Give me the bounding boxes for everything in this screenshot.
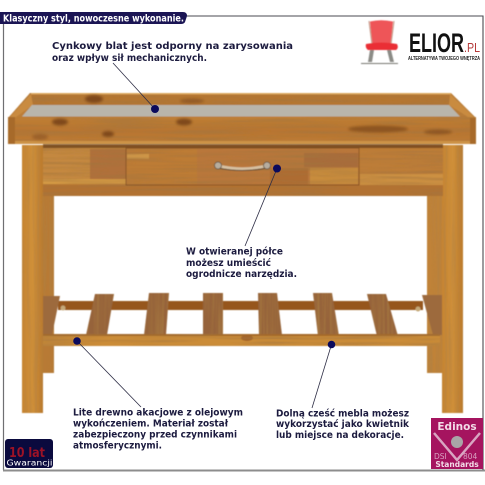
- callout: acacia wood: atmosferycznymi.: [73, 440, 162, 452]
- wooden table illustration: [8, 93, 476, 413]
- badge: Edinos standards: [431, 418, 483, 469]
- callout: drawer: możesz umieścić: [186, 258, 271, 269]
- callout: acacia wood: Lite drewno akacjowe z olejowym: [73, 408, 243, 418]
- callout: acacia wood: zabezpieczony przed czynnikami: [73, 430, 237, 440]
- logo domain suffix: .PL: [464, 40, 480, 55]
- shelf slats: [86, 293, 398, 336]
- wood knots and grain: [32, 95, 452, 140]
- icon: drawer handle: [214, 162, 270, 170]
- badge: 10-year warranty: Gwarancji: [6, 458, 53, 468]
- badge: 10-year warranty: 10 lat: [9, 446, 45, 461]
- rear legs: [43, 196, 442, 373]
- badge: Edinos standards: 804: [463, 452, 478, 461]
- callout: lower shelf: lub miejsce na dekoracje.: [276, 430, 404, 441]
- badge: Edinos standards: DSI: [434, 452, 447, 461]
- shelf side rails: [43, 295, 442, 335]
- callout: lower shelf: wykorzystać jako kwietnik: [276, 419, 410, 430]
- icon: red chair: [361, 20, 398, 64]
- badge: 10-year warranty: [5, 439, 53, 468]
- callout: drawer: W otwieranej półce: [186, 246, 283, 258]
- badge: Edinos standards: Standards: [435, 460, 479, 469]
- callout: lower shelf: Dolną cześć mebla możesz: [276, 408, 409, 420]
- badge: Edinos standards: Edinos: [437, 421, 477, 433]
- drawer: [126, 148, 359, 185]
- zinc top surface: [22, 105, 460, 116]
- callout: drawer: ogrodnicze narzędzia.: [186, 269, 297, 280]
- callout: zinc tabletop: Cynkowy blat jest odporny na zarysowania: [52, 41, 293, 52]
- callout: lower shelf: [276, 341, 410, 441]
- shadow under tabletop: [43, 144, 443, 148]
- callout: drawer: [186, 164, 297, 280]
- shelf back rail: [58, 301, 423, 310]
- callout: zinc tabletop: oraz wpływ sił mechanicznych.: [52, 53, 207, 64]
- callout: zinc tabletop: [52, 41, 293, 113]
- tabletop tray: [8, 93, 476, 144]
- tabletop front face: [8, 117, 476, 144]
- shelf front rail: [43, 334, 440, 346]
- heading banner: Klasyczny styl, nowoczesne wykonanie.: [3, 14, 184, 24]
- logo: Elior.pl: [361, 20, 480, 64]
- apron: [43, 145, 443, 196]
- callout: acacia wood: wykończeniem. Materiał został: [73, 418, 229, 430]
- front legs: [22, 145, 463, 413]
- callout: acacia wood: [73, 337, 243, 452]
